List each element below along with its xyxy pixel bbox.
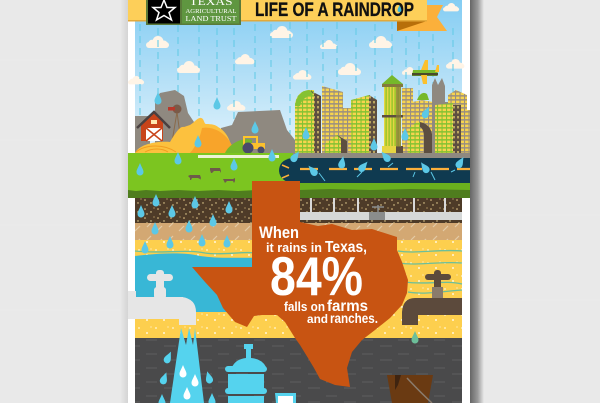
red barn [137, 112, 170, 141]
grazing cows [188, 168, 235, 183]
tan sand layer [135, 223, 462, 240]
road [279, 153, 470, 198]
Texas statistic text: 84% [270, 245, 363, 307]
header banner [128, 0, 447, 31]
green hedge [225, 139, 252, 153]
soil layer [135, 198, 462, 223]
logo badge: AGRICULTURAL [186, 9, 237, 15]
mountains [135, 90, 295, 153]
white fence [198, 155, 279, 158]
yellow tractor [242, 137, 265, 154]
yellow aquifer layer [135, 240, 462, 338]
Texas statistic text: When [259, 223, 299, 242]
Texas statistic text: falls on [284, 299, 325, 314]
windmill [168, 104, 182, 142]
clean white faucet [128, 270, 196, 325]
water drip [412, 331, 418, 344]
water stream [158, 328, 216, 403]
airplane [412, 60, 439, 84]
green farmland [128, 153, 300, 198]
sky panel [128, 0, 464, 158]
rusty bucket [387, 375, 433, 403]
logo badge: LAND TRUST [186, 15, 237, 23]
rusty faucet [402, 270, 462, 325]
poster paper [128, 0, 470, 403]
water jug [225, 344, 267, 403]
logo badge [146, 0, 241, 25]
rain streaks [140, 22, 453, 172]
Texas statistic text: it rains in [266, 240, 322, 255]
green water streaks [135, 251, 462, 314]
Texas statistic text [259, 223, 378, 326]
Texas map [192, 181, 408, 387]
falling water drops [136, 92, 467, 254]
underground pipe [300, 198, 462, 220]
glass of water [275, 393, 296, 403]
dark grass band [128, 189, 470, 198]
blue water body [135, 253, 262, 312]
hay field [135, 118, 236, 153]
bedrock layer [135, 338, 462, 403]
Texas statistic text: farms [327, 298, 368, 315]
city skyline [295, 75, 470, 154]
Texas statistic text: Texas, [325, 239, 367, 256]
Texas statistic text: and [307, 312, 328, 326]
Texas statistic text: ranches. [330, 310, 378, 326]
